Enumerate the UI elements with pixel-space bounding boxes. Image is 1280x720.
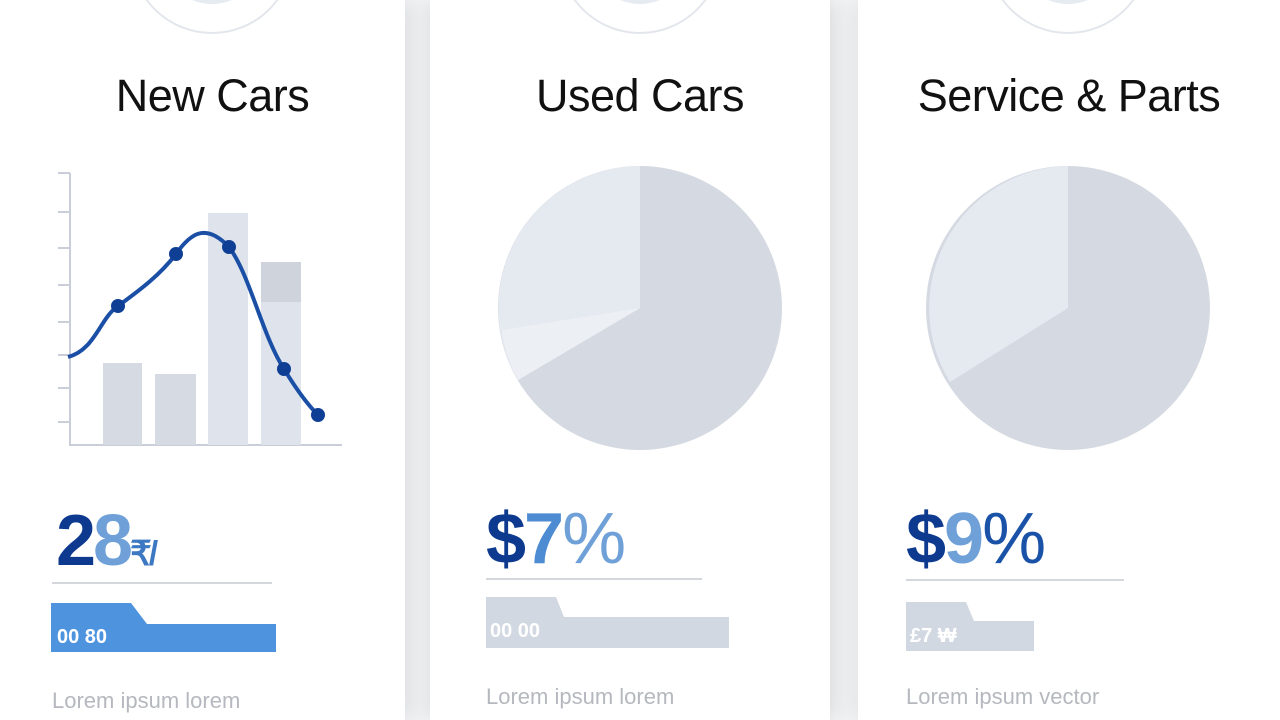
text block: Lorem ipsum vector <box>906 684 1099 709</box>
icon: top circle <box>558 0 722 34</box>
heading: Used Cars <box>536 70 744 121</box>
panel: service & parts <box>858 0 1280 720</box>
progress tag <box>51 603 276 652</box>
progress tag: 00 00 <box>490 620 540 642</box>
stat value: $9% <box>906 499 1044 579</box>
text block: Lorem ipsum lorem <box>486 684 674 709</box>
progress tag <box>486 597 729 648</box>
pie chart <box>498 166 782 450</box>
icon: top circle <box>130 0 294 34</box>
panel: new cars <box>0 0 405 720</box>
progress tag <box>906 602 1034 651</box>
heading: Service & Parts <box>918 70 1220 121</box>
stat value: $7% <box>486 499 624 579</box>
chart: line and bars <box>58 172 342 446</box>
heading: New Cars <box>116 70 309 121</box>
stat value: 28₹/ <box>56 501 155 581</box>
icon: top circle <box>986 0 1150 34</box>
progress tag: 00 80 <box>57 626 107 648</box>
text block: Lorem ipsum lorem <box>52 688 240 713</box>
pie chart <box>926 166 1210 450</box>
panel: used cars <box>430 0 830 720</box>
progress tag: £7 ₩ <box>910 625 957 647</box>
